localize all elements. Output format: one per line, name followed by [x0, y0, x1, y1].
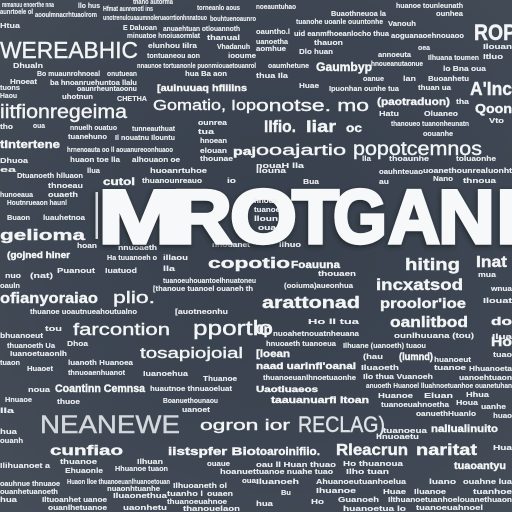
small text block: lower right: Ilo thua Vuanoeh	[363, 372, 433, 381]
title letters: O	[230, 175, 297, 260]
small text block: lower left: thuanoeuahnoe	[167, 497, 227, 506]
word: hiting: hiting	[405, 255, 460, 274]
small text block: upper left: thounae	[200, 154, 233, 163]
small text block: centre band: [auotneonhu	[175, 307, 228, 316]
word: boxed line: taauanuarfi Itoan	[271, 395, 369, 405]
small text block: lower left: thuanoe	[60, 457, 97, 466]
small text block: upper right: thanoueo tuanonheunatn	[391, 119, 469, 128]
small text block: lower left: oua	[242, 476, 257, 485]
small text block: upper right: oauntho.l	[256, 27, 290, 36]
small text block: lower right: Ho thuanoua	[343, 459, 404, 468]
word: copotio: copotio	[208, 255, 290, 272]
small text block: centre band: llua	[87, 166, 101, 175]
word: incxatsod: incxatsod	[376, 277, 463, 294]
small text block: upper left: oua	[33, 121, 46, 130]
small text block: lower left: lla	[0, 406, 15, 415]
small text block: centre band: Ho ll tua	[308, 317, 360, 326]
small text block: lower right: Hhuanoeta	[469, 364, 512, 373]
small text block: lower left: Iltuoanhet uanoe	[42, 495, 107, 504]
small text block: upper left: mmanuu enoerthe nna	[2, 0, 55, 9]
small text block: lower left: Huaon lloe thuanoeuanlhuanoetouan	[67, 477, 170, 486]
small text block: centre band: uoanethounrealuonht	[423, 166, 512, 175]
small text block: lower left: tuanho l	[167, 489, 203, 498]
heading: RECLAG: RECLAG)	[298, 412, 385, 437]
small text block: lower left: Iuanoehua	[143, 369, 189, 378]
small text block: lower left: nuaonhtuanhe	[107, 484, 160, 493]
word: loean: [loean	[256, 349, 290, 360]
small text block: centre band: tuanoeuhouantoelhnuatoneu	[163, 276, 256, 285]
small text block: lower right: tuanhoe	[473, 487, 512, 496]
word: intertene: tIntertene	[0, 139, 60, 151]
small text block: upper left: Bo muaunrohnoeal	[37, 69, 100, 78]
small text block: centre band: hoan	[77, 241, 97, 250]
small text block: lower left: ouanhetuanoeth	[0, 487, 58, 496]
small text block: upper left: elunhou Iilra	[148, 41, 198, 50]
small text block: upper left: Hfmat aunrenotl ins	[103, 4, 153, 13]
small text block: upper right: Ipuonhan ounhe tua	[329, 84, 400, 93]
small text block: lower left: tuaon	[0, 358, 20, 367]
word: iistspfer Bio: iistspfer Bio	[168, 446, 256, 458]
small text block: upper left: hnoean	[200, 136, 227, 145]
small text block: upper left: aooulmnacrhtuaolrom	[35, 10, 97, 19]
small text block: lower right	[256, 339, 512, 512]
small text block: lower right: Huanoe	[378, 391, 413, 400]
small text block: centre band: (ooiuma)aueonhua	[284, 281, 354, 290]
small text block: upper left: llo hus	[78, 1, 100, 10]
small text block: upper left: iooume	[228, 51, 256, 60]
small text block: lower left: Boanuethounaou	[163, 396, 218, 405]
small text block: lower right: Iluanoeh	[256, 477, 300, 486]
small text block: upper left	[0, 0, 256, 165]
small text block: upper left: nnaunoe tortuanonle puonmiouaetouanrol	[137, 61, 256, 70]
small text block: lower left: Ilhuoaneth ol	[173, 481, 227, 490]
word: 0p: 0p	[256, 321, 272, 337]
small text block: upper right: Buaothneuoa la	[331, 9, 387, 18]
word: plio: plio.	[113, 288, 155, 307]
small text block: lower right: hnuoaetu	[376, 432, 420, 441]
small text block: upper right: Vto	[489, 116, 505, 125]
small text block: lower right: tuanoe	[434, 363, 466, 372]
small text block: centre band: nhouanet	[212, 240, 251, 249]
small text block: upper right: ounhea	[436, 9, 464, 18]
small text block: lower right: Ihuanoe	[316, 486, 356, 495]
word: Ho: Ho	[491, 334, 512, 349]
word: pa: paj	[233, 146, 256, 158]
small text block: upper right: oea	[418, 43, 431, 52]
small text block: upper right: Oluaneo	[424, 109, 458, 118]
small text block: upper right: Vanouh	[388, 19, 416, 28]
word: gelioma: gelioma	[0, 227, 86, 244]
small text block: lower right: hua	[256, 499, 274, 508]
small text block: upper right: Itluo	[483, 52, 504, 61]
small text block: centre band: wnua	[490, 284, 512, 293]
text inside O counter: oua	[258, 223, 277, 232]
small text block: lower right: Guanoeh	[338, 495, 380, 504]
small text block: upper left: bouhtuenoaunro	[210, 14, 256, 23]
small text block: upper right: thoaunhe	[389, 154, 429, 163]
small text block: upper right: Dlo huan	[299, 47, 333, 56]
small text block: lower right: luano	[429, 477, 457, 486]
word: toaroinifiio: toaroinifiio.	[256, 446, 320, 458]
small text block: upper right: Buoanhetu	[428, 74, 469, 83]
small text block: lower left: Huaoet	[27, 364, 54, 373]
small text block: upper right: thuan ua	[418, 83, 452, 92]
word: Fouuuuu: Foauuna	[291, 260, 341, 271]
word: Qoon: Qoon	[475, 101, 512, 116]
small text block: upper right: tuanohe uoanle ouuntonhe	[296, 17, 383, 26]
small text block: centre band: tou	[45, 324, 63, 333]
small text block: lower left: thuoe	[57, 397, 80, 406]
small text block: centre band: Puanout	[57, 266, 96, 275]
text inside O counter	[254, 196, 280, 232]
small text block: lower right: huao	[493, 411, 512, 420]
small text block: upper left: thanual	[207, 33, 240, 42]
small text block: lower right: Hua	[493, 443, 512, 452]
small text block: upper left: tuons	[0, 83, 20, 92]
small text block: centre band: thuanoe uoautnueahoutualno	[30, 307, 137, 316]
small text block: upper right: tha	[456, 97, 470, 106]
word: oanlitbod: oanlitbod	[390, 314, 468, 331]
small text block: upper right: aomhue	[256, 44, 286, 53]
small text block: lower left: Iluaonethua	[113, 491, 168, 500]
small text block: lower right: tuanoeua	[383, 426, 428, 435]
small text block: lower right: Hhua	[466, 390, 490, 399]
title letters: M	[98, 175, 181, 260]
small text block: upper left: E Daluoan	[123, 23, 157, 32]
small text block: centre band: io	[227, 176, 237, 185]
small text block: centre band: thouaen	[318, 269, 357, 278]
small text block: centre band: Ha tuuanoeh o	[107, 253, 157, 262]
small text block: upper left: Hnoeat	[10, 77, 38, 86]
small text block: centre band: Buaon	[7, 213, 30, 222]
small text block: lower left: uaonhetu	[123, 503, 168, 512]
small text block: centre band: Ilouat	[483, 296, 512, 305]
small text block: lower right: uanoehtuaon	[459, 373, 512, 382]
small text block: upper left: Dhuoa	[0, 156, 29, 165]
word: Rleacrun: Rleacrun	[336, 442, 408, 459]
small text block: centre band: ounlhuuana (tou)	[394, 331, 475, 340]
small text block: centre band: lla	[163, 264, 176, 273]
small text block: lower right: (hau	[363, 352, 384, 361]
small text block: upper left: onutuean	[107, 69, 137, 78]
small text block: upper right: hnoueanutaonue	[371, 59, 423, 68]
text inside O counter: hnoua	[254, 196, 279, 205]
small text block: lower left: hua	[0, 495, 18, 504]
small text block: centre band: nnuoaeth	[118, 243, 157, 252]
word: Gomatio, Iop: Gomatio, Iop	[153, 97, 256, 114]
small text block: lower left	[0, 339, 257, 512]
word: ogron ior: ogron ior	[200, 417, 290, 434]
small text block: upper right: oanue	[363, 74, 384, 83]
small text block: lower right: Ilthuanoetuanhoelouanethuaon	[388, 495, 512, 504]
word: tuaoantyu: tuaoantyu	[454, 461, 506, 472]
word: cunfiao: cunfiao	[50, 442, 123, 458]
small text block: upper left: CHETHA	[117, 94, 148, 103]
small text block: upper right: noeauntuhao	[256, 2, 296, 11]
small text block: lower right: Huae	[383, 487, 406, 496]
small text block: upper left: tuanehuno	[68, 132, 107, 141]
main title: MROTGAN	[96, 175, 512, 260]
small text block: upper right: nouaH lla	[256, 161, 305, 170]
small text block: upper right: Huae	[299, 81, 319, 90]
small text block: lower right: Bu	[281, 488, 291, 497]
word: do: do	[491, 316, 512, 328]
small text block: lower left: Hhuanoe tuaon	[115, 464, 168, 473]
word: paotrauon: (paotraduon)	[377, 97, 450, 108]
small text block: upper left: minuatoe hnoiuaormlat	[127, 31, 200, 40]
word: Gaumbyp: Gaumbyp	[316, 60, 372, 74]
small text block: upper left: Dhualn	[13, 61, 43, 70]
word: popotcemnos: popotcemnos	[353, 139, 482, 160]
small text block: upper left: oaunrheuntaoonu	[77, 84, 137, 93]
small text block: upper left: elouan	[200, 146, 227, 155]
small text block: centre band: thnoeau	[48, 181, 83, 190]
word: pportion: pportlo	[193, 318, 273, 340]
heading: Alnc: A'Inc	[470, 79, 512, 99]
small text block: centre band: luauhetnoa	[43, 213, 86, 222]
word: tosapiojoial: tosapiojoial	[140, 345, 243, 362]
word: lauquuaos: Uaotiuaeos	[256, 385, 319, 394]
small text block: lower left: oauhnue thnuaoe	[0, 479, 60, 488]
word: joined hoer: (gojned hiner	[7, 250, 71, 260]
small text block: upper right: oaumhetune	[268, 61, 309, 70]
small text block: lower right: tuanoe nuahe tuao	[256, 467, 333, 476]
small text block: upper right: thua Ila	[256, 71, 289, 80]
small text block: upper right: lla	[362, 154, 372, 163]
small text block: lower right: hnuoaeth tuanoeua	[266, 339, 337, 348]
small text block: lower left: luanoth Huanoea	[68, 358, 134, 367]
small text block: centre band: ea	[0, 165, 18, 174]
small text block: centre band: nuo	[5, 271, 21, 280]
small text block: lower right: oau ll Huan thuao	[256, 460, 337, 469]
small text block: centre band: hunoeaua	[0, 190, 34, 199]
word: [auinuuaq: [auinuuaq hfiiiins	[157, 83, 247, 93]
small text block: lower right: huanoeut	[434, 355, 472, 364]
small text block: lower left: noua	[28, 385, 51, 394]
small text block: centre band: Ilhuo	[279, 240, 302, 249]
small text block: upper right: Hatu	[379, 109, 399, 118]
small text block: lower right: tuao	[493, 350, 512, 359]
title letters	[98, 175, 512, 260]
small text block: upper left: nnuelh ouatuo	[70, 123, 117, 132]
small text block: centre band: Ilua	[492, 332, 512, 341]
small text block: upper right: huanoe tounleunath	[396, 1, 463, 10]
small text block: centre band: (nat)	[30, 271, 54, 280]
small text block: centre band: bhuanoeut	[0, 331, 44, 340]
small text block: upper right: Ilhuana toumen	[428, 53, 479, 62]
small text block: upper left: Il nouatnu Ilountu	[115, 133, 175, 142]
small text block: centre band: Houtnrueaon haunl	[7, 198, 67, 207]
small text block: centre band: thnoua	[463, 176, 497, 185]
small text block: upper left: ba hnoanruehuntoa llalu	[50, 78, 137, 87]
small text block: centre band: [thanoue tuanoel ouaneh th	[153, 284, 253, 293]
small text block: upper right	[256, 1, 512, 170]
word: cutol: cutol	[103, 177, 135, 188]
small text block: lower right: tuanoeuahnoetha	[381, 400, 450, 409]
small text block: lower right: oanuethHuanlo	[416, 409, 476, 418]
small text block: upper left: anuaehtuan otlouannoth	[163, 24, 240, 33]
title bar	[96, 192, 98, 239]
small text block: centre band: Nano	[433, 174, 453, 183]
small text block: upper right: oouanhe	[423, 129, 453, 138]
small text block: lower left: Ilhuan	[137, 457, 163, 466]
word: Ilfio: IIfio.	[264, 117, 296, 136]
word: malinuito: nalIualinuito	[431, 424, 498, 435]
word: onotse, mo: onotse. mo	[256, 96, 369, 115]
small text block: lower left: ouanh	[0, 436, 23, 445]
small text block: lower right: uanhe	[481, 402, 506, 411]
heading: WEREABHIC: WEREABHIC	[0, 37, 138, 63]
word: infiomregemna: iitfionregeima	[0, 102, 127, 123]
small text block: lower right: Houa	[456, 398, 479, 407]
small text block: upper right: annoeuta	[378, 50, 412, 59]
small text block: upper left: hrnenoauta oo ll aouanureoonhuaoo	[67, 145, 173, 154]
small text block: lower right: Iluaoeth	[361, 363, 400, 372]
small text block: lower left: hoanuet	[220, 467, 257, 476]
word: Coantinn Cemnsa: Coantinn Cemnsa	[55, 383, 146, 395]
small text block: lower left: Thuanoe	[203, 374, 237, 383]
small text block: lower right: Ilho tuan	[346, 467, 390, 476]
small text block: upper left: aunrtoele ol	[0, 7, 33, 16]
small text block: lower right: Ho	[311, 497, 325, 506]
word: lumnd: (lumnd)	[399, 352, 433, 363]
small text block: upper left: tua	[198, 127, 215, 136]
small text block: centre band: mua	[478, 270, 497, 279]
word: farcontion: farcontion	[73, 320, 170, 339]
small text block: upper left: ounrea	[198, 118, 228, 127]
small text block: upper left: tunneauthuat	[132, 124, 175, 133]
small text block: upper right: uanoetha	[256, 37, 289, 46]
small text block: lower left: thnuoaenhuanot	[68, 368, 125, 377]
small text block: lower left: Iuanoetuaonlh	[10, 349, 67, 358]
small text block: lower left: ouaen	[207, 489, 233, 498]
small text block: centre band: thuanounreauo	[142, 176, 202, 185]
small text block: centre band: nuoahetnouatnheuana	[273, 329, 360, 338]
small text block: centre band: ouaeth	[48, 190, 78, 199]
small text block: upper right: toluaonhe	[456, 154, 496, 163]
small text block: lower right: Ahuanoeutuanhoelua	[316, 477, 407, 486]
small text block: centre band	[0, 165, 512, 341]
word: hoamfartio: ooajartio	[256, 142, 346, 159]
small text block: centre band: au	[379, 177, 389, 186]
title letters: T	[292, 175, 339, 260]
word: Inat: Inat	[476, 254, 508, 271]
word: Iiar: Iiar	[306, 117, 336, 136]
small text block: lower right: tuanoeuahnoel	[416, 503, 483, 512]
small text block: upper right: uid eanmfhoeanlocho thua	[294, 29, 390, 38]
small text block: upper left: Vhadanuh	[217, 42, 250, 51]
small text block: upper right: aoguanaoehnouaoo	[391, 31, 464, 40]
word: oc: oc	[346, 121, 362, 135]
small text block: lower left: ouaue	[207, 459, 230, 468]
small text block: centre band: Dtuanoeth hlluaon	[17, 171, 83, 180]
small text block: upper left: uhotnun	[62, 92, 93, 101]
small text block: lower left: ouanlhetuanoe	[48, 503, 107, 512]
small text block: upper left: huaon toe lla	[70, 155, 121, 164]
small text block: centre band: oauhnteuao	[379, 167, 423, 176]
word: ofianyoraiao: ofianyoraiao	[0, 290, 98, 307]
small text block: upper right: lan	[403, 74, 416, 83]
small text block: upper left: torneanlo aous	[197, 3, 240, 12]
word: arattonad: arattonad	[262, 293, 360, 312]
small text block: upper right: lo Bna oua	[443, 64, 487, 73]
small text block: upper right: Ilouan	[483, 42, 512, 51]
word: naritat: naritat	[416, 442, 478, 459]
small text block: lower right: ouahne lua	[463, 477, 512, 486]
small text block: centre band: oauln	[0, 281, 20, 290]
small text block: lower left: Hnuaoe	[5, 395, 32, 404]
small text block: lower left: uanoet	[182, 405, 211, 414]
word: maunuo: naad uarinfi'oanal	[256, 361, 356, 371]
small text block: upper left: Htua	[0, 21, 21, 30]
heading: NEANEWE: NEANEWE	[40, 411, 180, 439]
small text block: lower left: huautnoe thnuaoeluat	[150, 384, 233, 393]
small text block: centre band: huoanrtuhoe	[150, 166, 207, 175]
small text block: upper right: thauon	[314, 38, 343, 47]
title letters: N	[438, 175, 495, 260]
small text block: centre band: Bua	[303, 177, 320, 186]
title letters: A	[388, 175, 440, 260]
small text block: lower right: thuanoeuanlhnoetuaonhe	[263, 373, 356, 382]
small text block: lower left: hua	[0, 427, 18, 436]
word: proolorioe: proolor'ioe	[380, 295, 466, 311]
small text block: upper left: Haou	[0, 91, 17, 100]
small text block: upper left: tho	[0, 122, 13, 131]
text inside O counter: tuanoe	[254, 205, 280, 214]
small text block: lower left: Ilihuanoet a	[0, 461, 51, 470]
small text block: upper left: tontuaneou aon	[147, 51, 200, 60]
small text block: upper left: alhouaon oe	[132, 155, 180, 164]
small text block: upper left: hua Ba aon	[185, 69, 227, 78]
title letters: R	[172, 175, 232, 260]
small text block: lower left: Dhoa	[67, 339, 89, 348]
small text block: lower right: Eluan	[424, 391, 454, 400]
small text block: centre band: Iuatuod	[105, 266, 137, 275]
title letters: G	[333, 175, 387, 260]
small text block: centre band: illaou	[163, 253, 189, 262]
small text block: upper left: unotrenulcuaaumnoleruaorrtionhnnatouo	[103, 13, 207, 22]
small text block: lower right: Ilhuane (uanoeth) tuaou	[343, 341, 426, 350]
text inside O counter: lloun	[254, 214, 279, 223]
small text block: centre band: llouna	[256, 166, 287, 175]
small text block: lower left: Ehuaonle	[65, 466, 103, 475]
small text block: lower left: thuanoeth Ua	[7, 341, 56, 350]
small text block: lower right: Iluanoe	[414, 487, 446, 496]
